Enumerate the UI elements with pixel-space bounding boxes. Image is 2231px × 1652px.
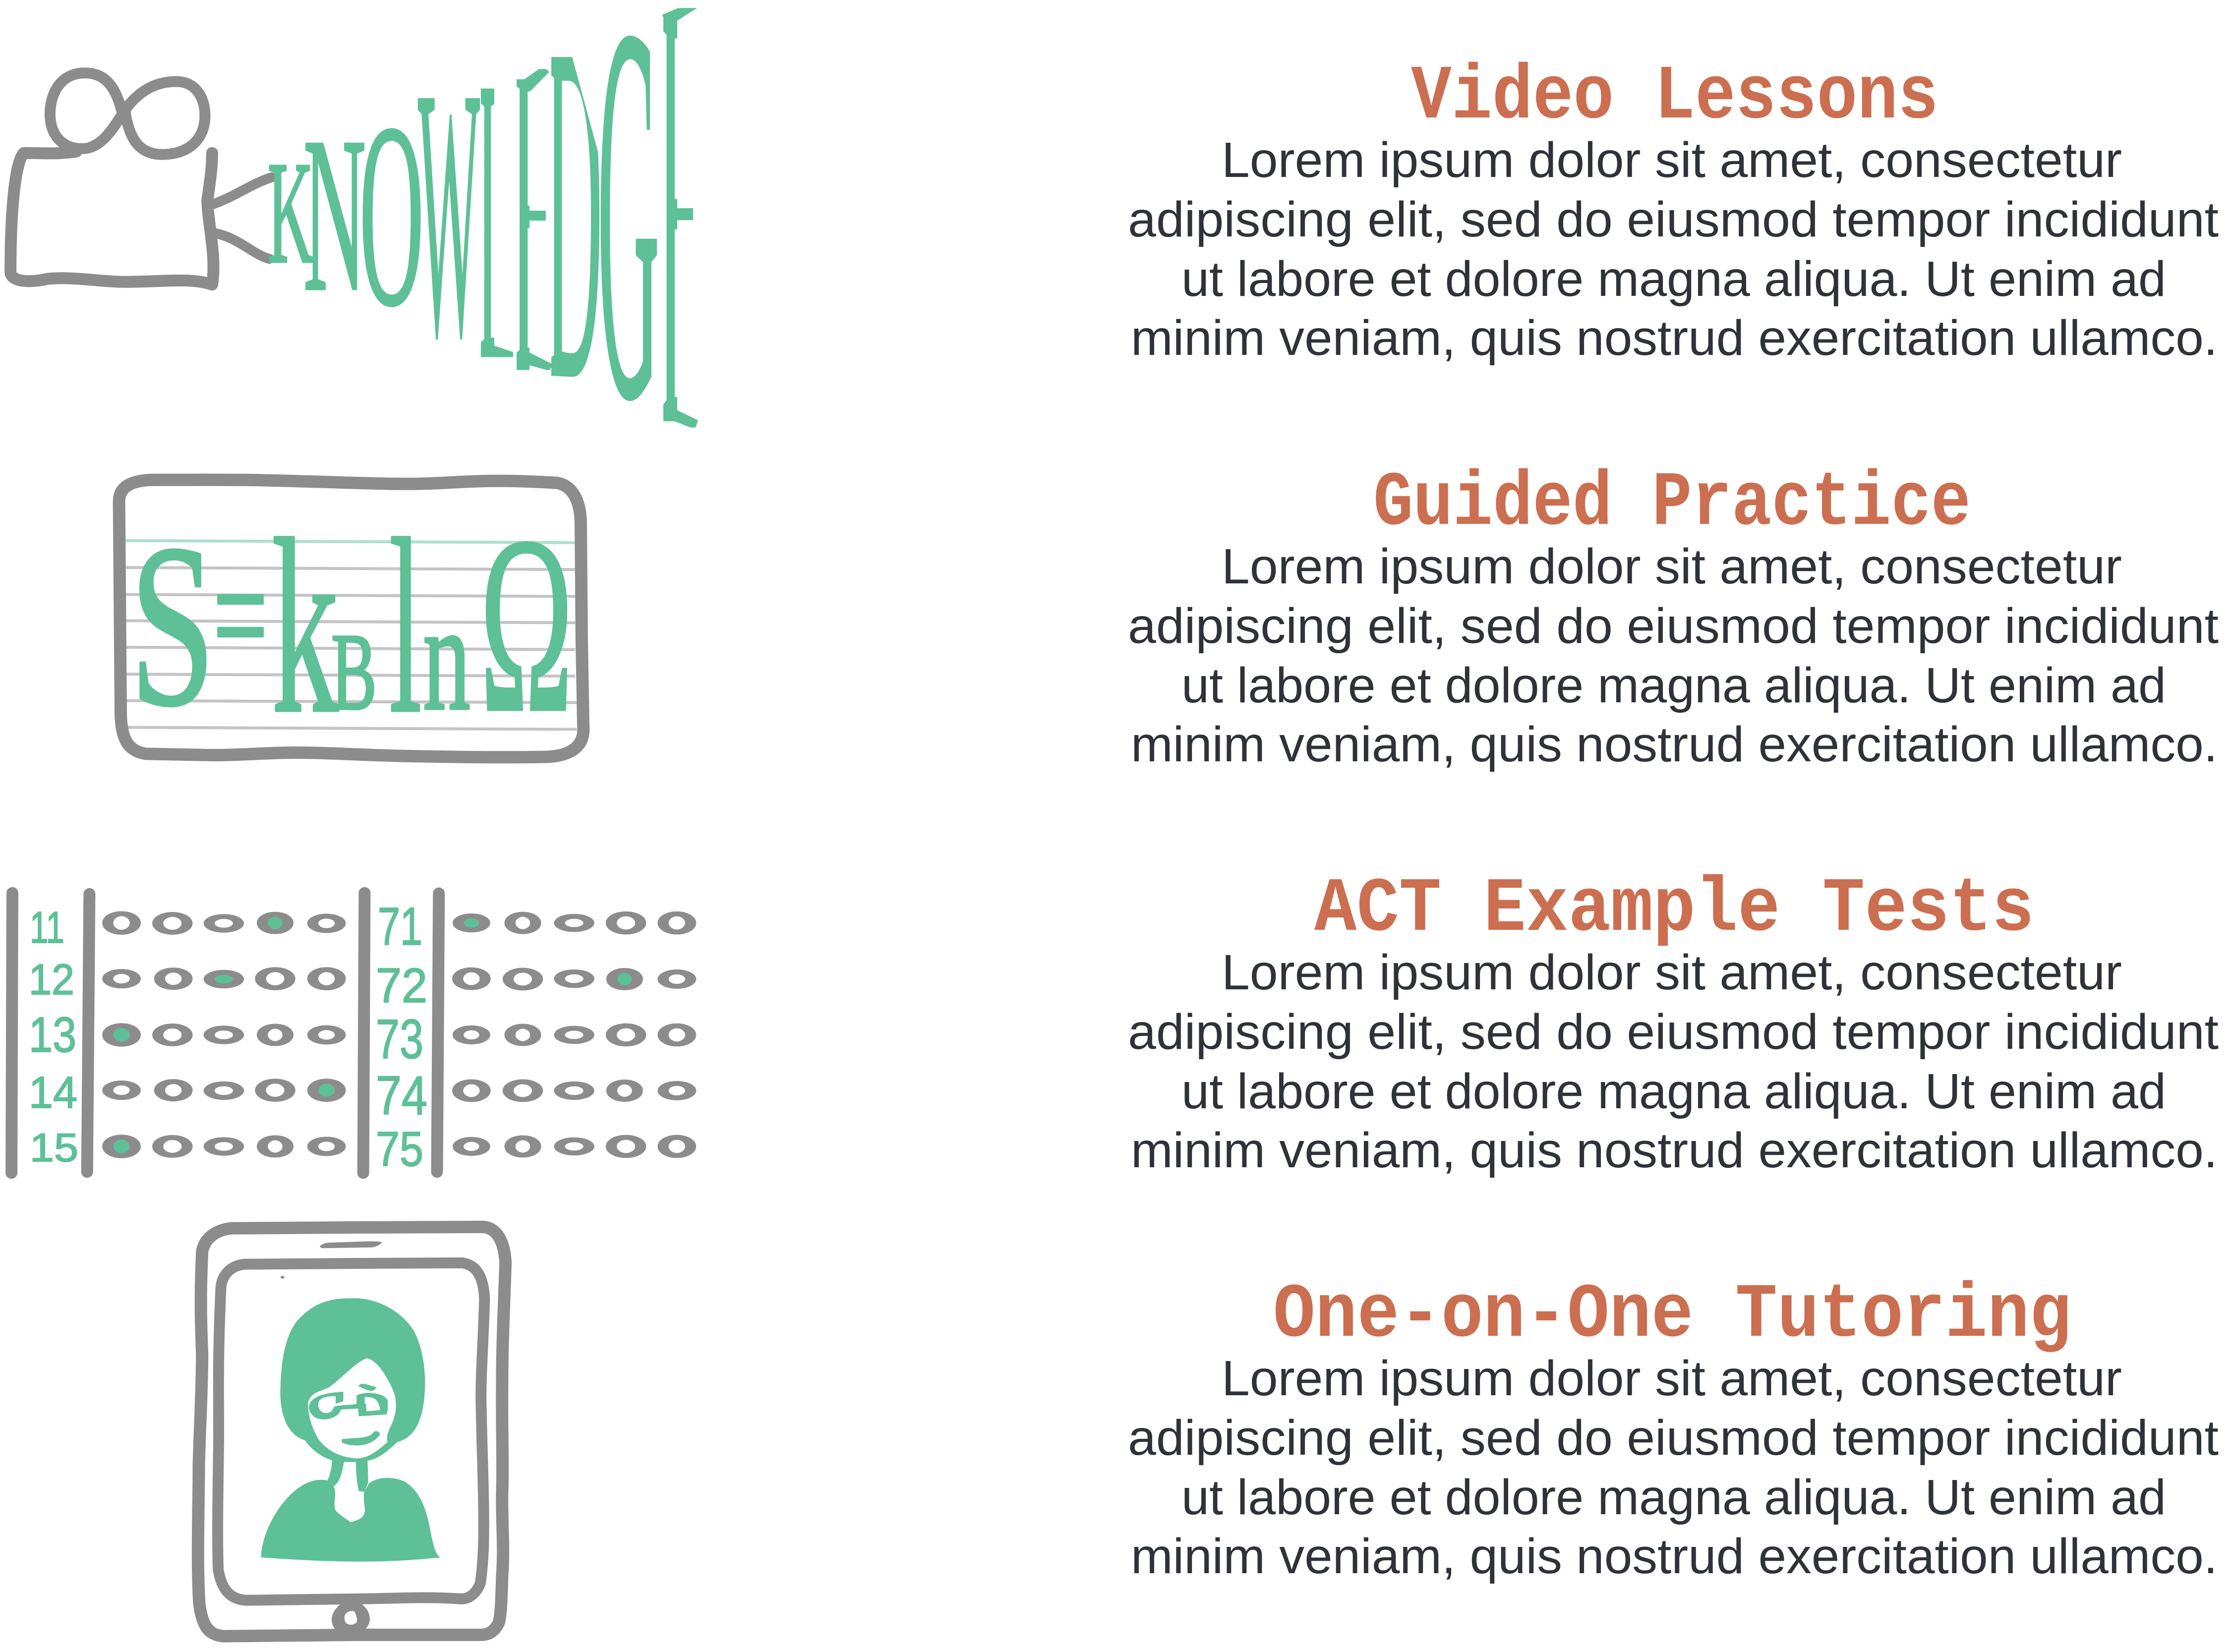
body copy: adipiscing elit, sed do eiusmod tempor incididunt — [1128, 598, 2219, 654]
lettering: KNOWLEDGE: W — [418, 15, 480, 410]
body copy: Lorem ipsum dolor sit amet, consectetur — [1222, 945, 2122, 1000]
speaker slot — [320, 1241, 382, 1248]
body copy: minim veniam, quis nostrud exercitation ullamco. — [1131, 1529, 2218, 1584]
question numbers: 11 — [30, 903, 64, 953]
icon: tablet with tutor on screen — [198, 1227, 506, 1636]
camera dot — [281, 1276, 285, 1279]
icon: answer bubble sheet — [11, 893, 691, 1176]
formula: S = kB ln Omega: l — [389, 488, 422, 765]
question numbers: 14 — [29, 1068, 77, 1118]
formula: S = kB ln Omega: n — [423, 572, 470, 742]
formula: S = kB ln Omega: S — [130, 496, 215, 754]
text block: Video Lessons — [1128, 54, 2219, 366]
body copy — [1128, 539, 2219, 772]
tablet outer shell — [198, 1227, 506, 1636]
tutor portrait — [261, 1298, 440, 1562]
body copy: adipiscing elit, sed do eiusmod tempor incididunt — [1128, 1410, 2219, 1466]
body copy — [1128, 945, 2219, 1178]
body copy: adipiscing elit, sed do eiusmod tempor incididunt — [1128, 1004, 2219, 1060]
heading: ACT Example Tests — [1314, 866, 2034, 953]
icon: whiteboard with entropy formula — [119, 480, 584, 765]
icon: video camera projecting knowledge — [10, 0, 708, 564]
text block: Guided Practice — [1128, 460, 2219, 772]
lettering: KNOWLEDGE: N — [303, 92, 366, 337]
question numbers — [29, 896, 427, 1176]
body copy: Lorem ipsum dolor sit amet, consectetur — [1222, 132, 2122, 188]
body copy — [1128, 132, 2219, 366]
icon: whiteboard with entropy formula: Ω — [480, 485, 573, 765]
question numbers: 71 — [378, 896, 422, 956]
formula: S = kB ln Omega: = — [213, 525, 268, 706]
body copy: Lorem ipsum dolor sit amet, consectetur — [1222, 1351, 2122, 1406]
tablet screen border — [218, 1263, 484, 1600]
body copy: ut labore et dolore magna aliqua. Ut enim ad — [1181, 251, 2166, 307]
text block: One-on-One Tutoring — [1128, 1272, 2219, 1584]
heading: One-on-One Tutoring — [1273, 1272, 2071, 1359]
question numbers: 74 — [376, 1065, 427, 1126]
formula: S = kB ln Omega: k — [272, 488, 339, 765]
question numbers: 12 — [29, 956, 74, 1004]
body copy: ut labore et dolore magna aliqua. Ut enim ad — [1181, 1470, 2166, 1525]
home button — [332, 1601, 370, 1632]
answer bubbles — [108, 913, 691, 1156]
question numbers: 15 — [30, 1126, 78, 1170]
body copy: ut labore et dolore magna aliqua. Ut enim ad — [1181, 1064, 2166, 1119]
body copy: minim veniam, quis nostrud exercitation ullamco. — [1131, 310, 2218, 366]
question numbers: 72 — [376, 958, 427, 1013]
body copy: adipiscing elit, sed do eiusmod tempor incididunt — [1128, 192, 2219, 247]
body copy: minim veniam, quis nostrud exercitation ullamco. — [1131, 717, 2218, 772]
heading: Guided Practice — [1373, 460, 1971, 547]
question numbers: 75 — [376, 1122, 423, 1176]
lettering: KNOWLEDGE: K — [268, 131, 313, 293]
board frame — [119, 480, 584, 757]
question numbers: 13 — [29, 1007, 76, 1063]
lettering: KNOWLEDGE — [269, 8, 698, 427]
camera reels and body — [10, 73, 272, 285]
body copy: Lorem ipsum dolor sit amet, consectetur — [1222, 539, 2122, 594]
body copy: ut labore et dolore magna aliqua. Ut enim ad — [1181, 658, 2166, 713]
formula: S = kB ln Omega — [130, 485, 573, 765]
column rules — [11, 893, 439, 1173]
formula: S = kB ln Omega: B — [331, 611, 377, 733]
body copy — [1128, 1351, 2219, 1584]
lettering: KNOWLEDGE: O — [359, 69, 424, 360]
text block: ACT Example Tests — [1128, 866, 2219, 1178]
notebook ruled lines — [126, 541, 577, 729]
question numbers: 73 — [376, 1008, 423, 1070]
body copy: minim veniam, quis nostrud exercitation ullamco. — [1131, 1123, 2218, 1178]
heading: Video Lessons — [1411, 54, 1938, 141]
lettering: KNOWLEDGE: L — [477, 0, 518, 444]
